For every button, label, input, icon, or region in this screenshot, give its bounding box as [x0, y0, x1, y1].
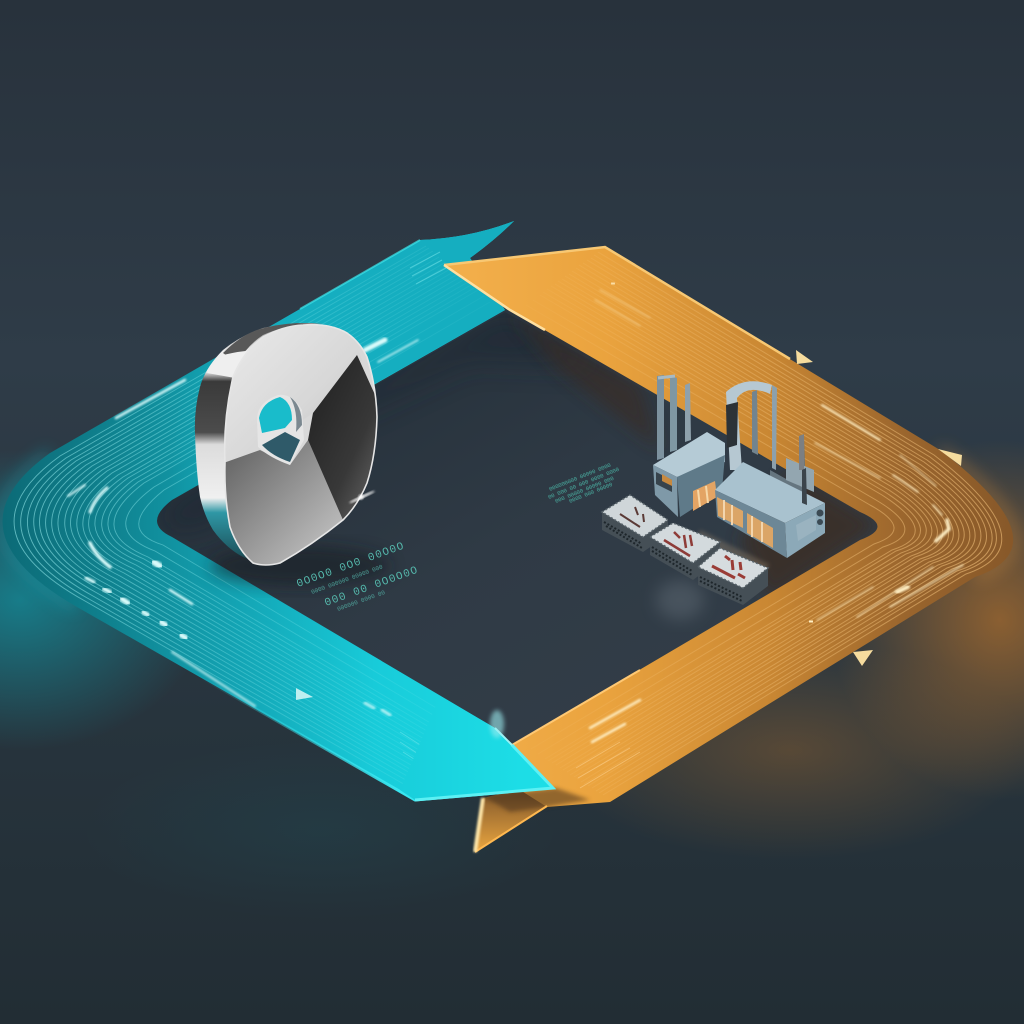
orange flow lines	[576, 252, 1002, 795]
right building	[715, 462, 825, 558]
teal flow lines	[14, 246, 490, 794]
floating glyph text left: 000 00 0O0O0O	[323, 565, 420, 610]
ring extruded side	[195, 323, 323, 566]
floating glyph text left: 0O0O0 0O0 00O0O	[295, 540, 407, 591]
ring front face	[226, 326, 376, 564]
icon: metallic ring	[195, 318, 390, 586]
central dark platform	[157, 312, 880, 745]
teal light streaks	[68, 340, 418, 715]
floating glyph text right: 000000000 00000 0000	[548, 462, 612, 493]
floating glyph text right: 00 000 00 000 0000 0000	[547, 466, 620, 501]
teal tip texture	[400, 252, 446, 761]
orange tip texture	[576, 742, 640, 788]
direction triangles	[296, 350, 962, 700]
floating glyph text right: 0000 000 00000	[568, 481, 614, 505]
orange tail	[475, 780, 560, 852]
teal arrow tip over orange	[400, 696, 553, 800]
factory chimneys	[657, 375, 814, 500]
orange arrow band	[444, 247, 1013, 852]
icon: isometric factory	[602, 375, 825, 605]
ring hole	[257, 395, 304, 465]
floating glyph text right: 000 00000 00000 000	[554, 475, 615, 505]
orange light streaks	[590, 283, 963, 742]
floor reflection	[690, 530, 770, 585]
left building	[653, 432, 725, 517]
floating glyph text left	[295, 540, 420, 613]
teal arrow band	[2, 221, 553, 800]
floating glyph text left: 0000 000000 00000 000	[310, 563, 384, 596]
floating glyph text left: 000000 0000 00	[336, 589, 386, 613]
storage modules	[602, 495, 768, 605]
